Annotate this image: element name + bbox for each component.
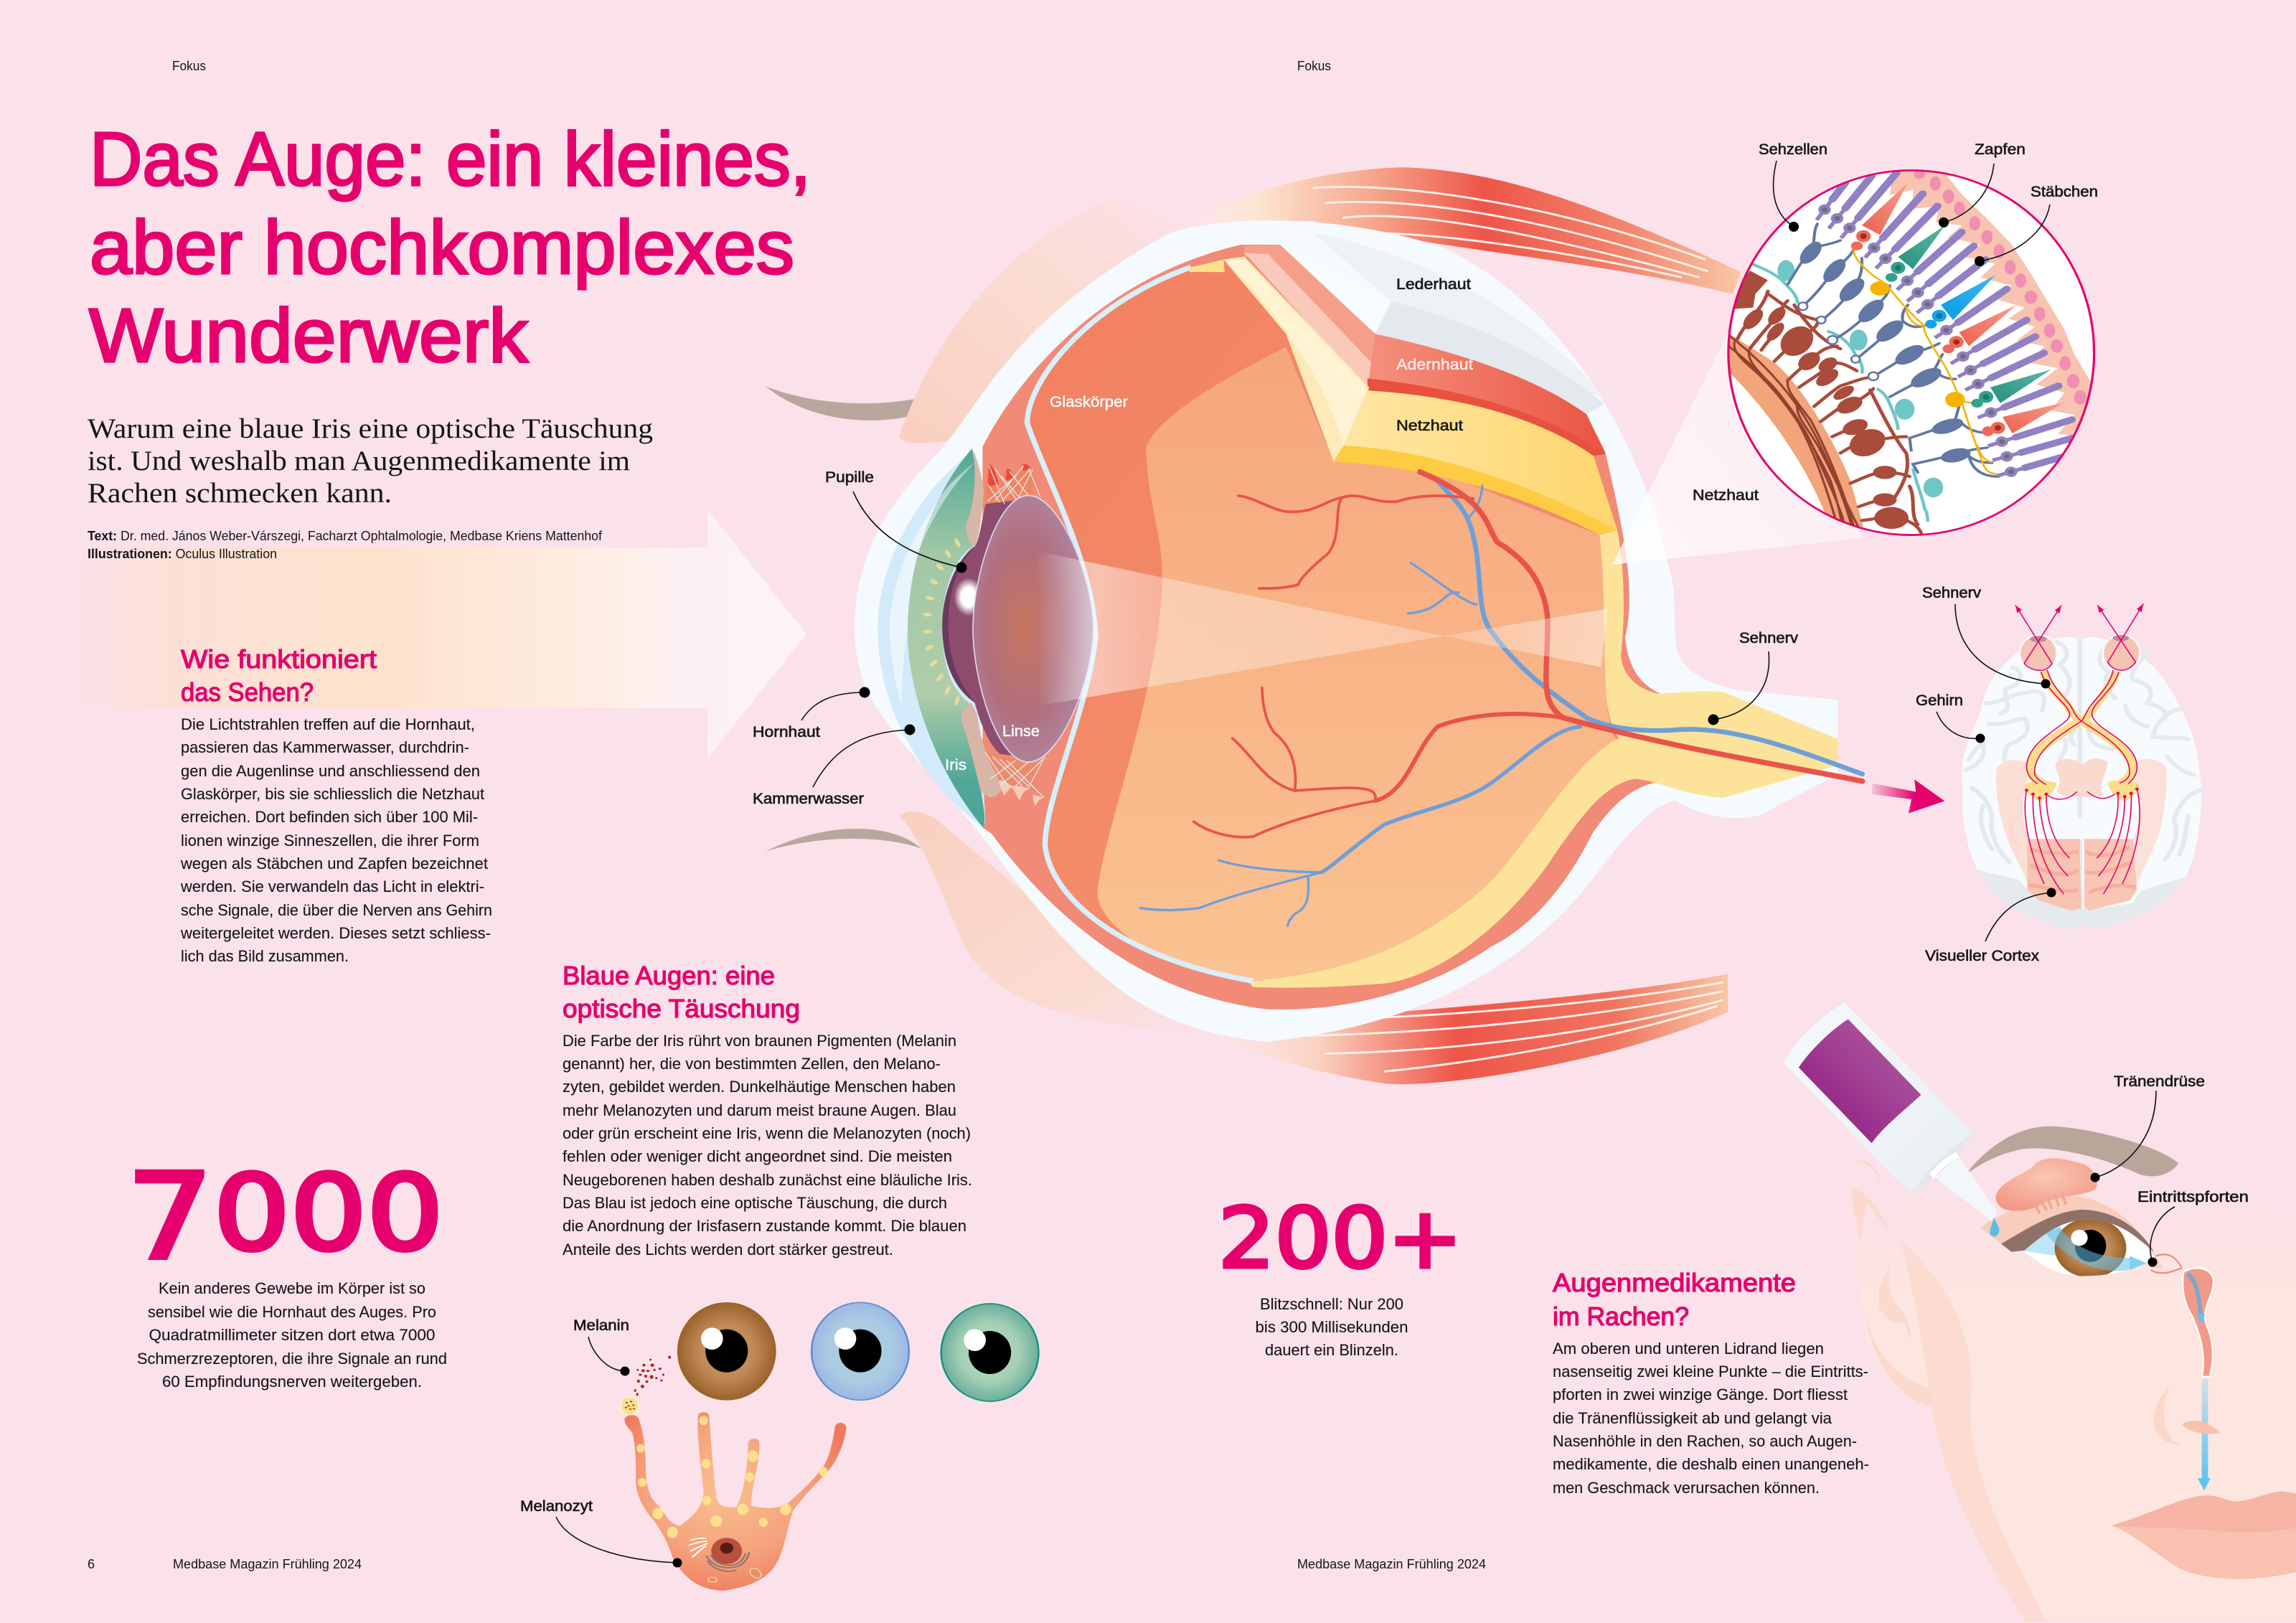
leader: Melanozyt: [556, 1517, 682, 1567]
iris: blue: [811, 1302, 909, 1400]
eye labels: Adernhaut: [1396, 357, 1473, 373]
choroid red layer: [982, 245, 1665, 1010]
lips: [2112, 1492, 2296, 1579]
text block: Blaue Augen: fehlen oder weniger dicht angeordnet sind. Die meisten: [563, 1147, 952, 1165]
text block: Augenmedikamente: pforten in zwei winzige Gänge. Dort fliesst: [1553, 1386, 1848, 1403]
leader: Kammerwasser: [813, 725, 916, 787]
retina labels: Zapfen: [1975, 141, 2026, 158]
text block: Blaue Augen: genannt) her, die von bestimmten Zellen, den Melano-: [563, 1055, 941, 1073]
text block: Wie funktioniert das Sehen: wegen als Stäbchen und Zapfen bezeichnet: [180, 855, 488, 872]
text block: 200+ caption: bis 300 Millisekunden: [1256, 1318, 1408, 1336]
blood vessels: blue veins: [1140, 478, 1863, 926]
lacrimal gland: [1996, 1158, 2097, 1213]
text block: Augenmedikamente: Am oberen und unteren Lidrand liegen: [1553, 1340, 1824, 1358]
optic nerve and retina yellow: [1250, 530, 1838, 988]
eye labels: Kammerwasser: [753, 791, 864, 807]
thalamus butterfly: [2055, 758, 2108, 797]
iris highlight streak: [913, 463, 974, 569]
iris: [908, 448, 984, 827]
wedge cut: Netzhaut surface: [1189, 257, 1617, 535]
bipolar terminal rings: [1798, 302, 1878, 380]
title: [89, 117, 811, 378]
eye labels: Hornhaut: [753, 724, 820, 740]
brain labels: Gehirn: [1916, 692, 1963, 709]
upper eye muscle: [1170, 167, 1741, 294]
header: Fokus right: Fokus: [1297, 59, 1331, 73]
text block: Blaue Augen: optische Täuschung: [563, 994, 800, 1023]
text block: 200+ caption: dauert ein Blinzeln.: [1265, 1341, 1398, 1359]
text block: Blaue Augen: Neugeborenen haben deshalb zunächst eine bläuliche Iris.: [563, 1171, 972, 1189]
melanin labels: [520, 1317, 629, 1515]
iris: brown: [677, 1302, 776, 1401]
eyelash band: [2001, 1210, 2154, 1252]
brain outline: [1962, 636, 2201, 930]
ganglion cells: [1733, 270, 1921, 533]
title: aber hochkomplexes: [90, 205, 794, 290]
iris flecks: [923, 537, 961, 706]
wedge cut: Adernhaut surface: [1244, 245, 1606, 456]
sclera white outer wall: [855, 220, 1838, 1042]
ear and cheek shading: [1851, 1161, 2046, 1622]
blood vessels: red arteries: [1194, 472, 1863, 837]
teal horizontal cells: [1751, 260, 1943, 522]
text block: Augenmedikamente: Nasenhöhle in den Rachen, so auch Augen-: [1553, 1432, 1857, 1450]
footer: right: Medbase Magazin Frühling 2024: [1297, 1557, 1486, 1571]
text block: Blaue Augen: Anteile des Lichts werden dort stärker gestreut.: [563, 1241, 893, 1259]
brain labels: Visueller Cortex: [1925, 948, 2040, 964]
header: Fokus left: Fokus: [172, 59, 206, 73]
right eye with crossing rays: [2097, 603, 2143, 672]
retina labels: [1693, 141, 2098, 504]
text block: Wie funktioniert das Sehen: erreichen. Dort befinden sich über 100 Mil-: [181, 808, 478, 826]
cones: [1851, 183, 2064, 436]
arrow to brain: [1871, 779, 1944, 814]
face labels: Tränendrüse: [2114, 1073, 2205, 1090]
eye labels: Lederhaut: [1396, 276, 1471, 293]
text block: Augenmedikamente: nasenseitig zwei kleine Punkte – die Eintritts-: [1553, 1363, 1868, 1380]
text block: Wie funktioniert das Sehen: Die Lichtstrahlen treffen auf die Hornhaut,: [181, 715, 475, 733]
text block: 7000 caption: Quadratmillimeter sitzen dort etwa 7000: [149, 1326, 435, 1344]
eye labels: Glaskörper: [1050, 394, 1128, 410]
eye labels: [753, 276, 1799, 807]
text block: Wie funktioniert das Sehen: weitergeleitet werden. Dieses setzt schliess-: [180, 924, 491, 942]
eye labels: Sehnerv: [1739, 630, 1799, 646]
vitreous lighter interior: [1097, 347, 1616, 981]
face labels: [2114, 1073, 2249, 1205]
text block: Blaue Augen: Das Blau ist jedoch eine optische Täuschung, die durch: [563, 1194, 947, 1212]
retina detail circle: [1725, 168, 2094, 535]
text block: Blaue Augen: zyten, gebildet werden. Dunkelhäutige Menschen haben: [563, 1078, 956, 1096]
yellow amacrine path: [1853, 250, 1997, 474]
text block: Wie funktioniert das Sehen: lich das Bild zusammen.: [181, 947, 349, 965]
melanin labels: Melanozyt: [520, 1498, 593, 1515]
text block: Wie funktioniert das Sehen: das Sehen?: [181, 677, 314, 707]
eye: [2023, 1218, 2156, 1278]
credits: [88, 529, 603, 561]
anterior eye: cornea, iris, lens: [878, 448, 1093, 827]
text block: 200+ caption: [1256, 1295, 1408, 1359]
text block: Blaue Augen: [563, 961, 972, 1259]
eye labels: Pupille: [825, 469, 874, 486]
iris: green: [941, 1304, 1038, 1401]
leader: Visueller Cortex: [1985, 888, 2056, 941]
credits: Illustrationen: Oculus Illustration: [88, 547, 277, 561]
text block: Wie funktioniert das Sehen: passieren das Kammerwasser, durchdrin-: [181, 738, 469, 756]
wedge cut: Lederhaut surface: [1280, 245, 1604, 414]
retina labels: Netzhaut: [1693, 487, 1759, 504]
title: Das Auge: ein kleines,: [90, 117, 811, 202]
text block: Blaue Augen: Blaue Augen: eine: [563, 961, 775, 990]
eye drop bottle: [1784, 1002, 1997, 1220]
leader: Melanin: [588, 1337, 630, 1376]
light arrow: [72, 509, 806, 758]
vitreous membrane line: [1027, 267, 1253, 981]
nucleus: [711, 1538, 742, 1564]
eye labels: Linse: [1002, 723, 1040, 740]
peach lateral structures: [1996, 759, 2167, 911]
face labels: Eintrittspforten: [2137, 1189, 2249, 1205]
retina labels: Stäbchen: [2031, 184, 2098, 200]
text block: 7000 caption: sensibel wie die Hornhaut des Auges. Pro: [148, 1303, 436, 1321]
tear duct: [2150, 1254, 2213, 1491]
pigment layer: [1890, 168, 2094, 436]
ciliary tissue: [961, 450, 1004, 797]
text block: Wie funktioniert das Sehen: Wie funktioniert: [181, 644, 377, 674]
lens capsule back: [942, 495, 1040, 763]
aqueous highlight: [890, 463, 974, 708]
text block: Wie funktioniert das Sehen: gen die Augenlinse und anschliessend den: [181, 762, 480, 780]
text block: Wie funktioniert das Sehen: sche Signale, die über die Nerven ans Gehirn: [181, 901, 492, 919]
big number: 200+: 200+: [1218, 1190, 1462, 1287]
brain with visual pathway: [1871, 603, 2201, 930]
optic radiation tracts: [2024, 670, 2140, 894]
vitreous body: [1027, 260, 1616, 981]
light rays through lens and vitreous: [1036, 551, 1607, 705]
footer: page number left: 6: [88, 1557, 95, 1571]
retina labels: Sehzellen: [1759, 141, 1827, 158]
melanocyte and iris colours: [621, 1302, 1038, 1591]
face with eye drops: [1784, 1002, 2296, 1622]
face skin: [1845, 1151, 2296, 1622]
subtitle: Warum eine blaue Iris eine optische Täuschung: [88, 413, 653, 444]
nerve fibre band: [1725, 331, 1863, 527]
melanin labels: Melanin: [573, 1317, 629, 1334]
text block: Wie funktioniert das Sehen: lionen winzige Sinneszellen, die ihrer Form: [181, 832, 479, 850]
text block: Augenmedikamente: [1553, 1268, 1869, 1497]
melanin vesicle and granules: [621, 1356, 671, 1415]
footer: page number left: [88, 1557, 362, 1571]
rods: [1817, 173, 2073, 477]
subtitle: ist. Und weshalb man Augenmedikamente im: [88, 446, 630, 476]
melanocyte cell: [624, 1412, 847, 1591]
text block: 7000 caption: 60 Empfindungsnerven weitergeben.: [162, 1373, 422, 1391]
leader: Sehnerv brain: [1955, 604, 2051, 689]
leader: Eintrittspforten: [2148, 1207, 2175, 1267]
lens: [973, 495, 1093, 762]
text block: Blaue Augen: die Anordnung der Irisfasern zustande kommt. Die blauen: [563, 1217, 966, 1235]
nose: [2153, 1387, 2220, 1446]
leader: Gehirn: [1937, 712, 1985, 743]
light cone towards retina detail: [1612, 316, 1863, 565]
text block: Blaue Augen: oder grün erscheint eine Iris, wenn die Melanozyten (noch): [563, 1124, 971, 1142]
text block: Augenmedikamente: medikamente, die deshalb einen unangeneh-: [1553, 1455, 1869, 1473]
leader: Pupille: [853, 491, 967, 573]
eye drop: [1990, 1218, 2000, 1236]
title: Wunderwerk: [89, 293, 529, 378]
credits: Text: Dr. med. János Weber-Várszegi, Facharzt Ophtalmologie, Medbase Kriens Mattenhof: [88, 529, 603, 543]
text block: 7000 caption: Kein anderes Gewebe im Körper ist so: [159, 1279, 425, 1297]
organelles: [690, 1538, 707, 1557]
text block: Augenmedikamente: Augenmedikamente: [1553, 1268, 1796, 1297]
big number: 7000: 7: [126, 1148, 214, 1286]
big number: 7000: 000: [214, 1153, 443, 1274]
text block: 7000 caption: Schmerzrezeptoren, die ihre Signale an rund: [137, 1350, 447, 1368]
leader: Sehzellen: [1774, 161, 1799, 232]
leader: Zapfen: [1939, 164, 1994, 227]
text block: Augenmedikamente: im Rachen?: [1553, 1302, 1689, 1331]
text block: Wie funktioniert das Sehen: Glaskörper, bis sie schliesslich die Netzhaut: [181, 785, 484, 803]
text block: Augenmedikamente: men Geschmack verursachen können.: [1553, 1479, 1820, 1497]
text block: 200+ caption: Blitzschnell: Nur 200: [1260, 1295, 1403, 1313]
subtitle: [88, 413, 653, 509]
leader: Stäbchen: [1975, 204, 2050, 266]
eye labels: Netzhaut: [1396, 418, 1463, 434]
visual cortex: [2027, 839, 2137, 911]
lower eye muscle: [1205, 974, 1728, 1084]
eye labels: Iris: [945, 757, 966, 773]
bipolar cells: [1788, 224, 1998, 476]
lower eyelid and lashes: [766, 812, 1218, 1033]
main eye cross-section: [766, 167, 1863, 1084]
lower brain shade: [1977, 870, 2186, 930]
brain labels: [1916, 585, 2040, 964]
text block: Blaue Augen: mehr Melanozyten und darum meist braune Augen. Blau: [563, 1101, 956, 1119]
eyelid: [1980, 1196, 2163, 1268]
leader: Sehnerv eye: [1708, 651, 1769, 725]
zonule fibres top: [985, 463, 1040, 504]
text block: Augenmedikamente: die Tränenflüssigkeit ab und gelangt via: [1553, 1409, 1832, 1427]
subtitle: Rachen schmecken kann.: [88, 478, 392, 509]
text block: Wie funktioniert das Sehen: werden. Sie verwandeln das Licht in elektri-: [180, 878, 484, 895]
text block: Blaue Augen: Die Farbe der Iris rührt von braunen Pigmenten (Melanin: [563, 1032, 956, 1050]
eyebrow: [1968, 1126, 2178, 1176]
footer: page number left: Medbase Magazin Frühling 2024: [173, 1557, 362, 1571]
leader: Hornhaut: [801, 687, 870, 720]
brain sulci: [1966, 639, 2200, 918]
brain labels: Sehnerv: [1922, 585, 1982, 601]
text block: 7000 caption: [137, 1279, 447, 1391]
text block: Wie funktioniert das Sehen: [180, 644, 492, 965]
left eye with crossing rays: [2015, 606, 2061, 672]
aqueous humour: [878, 453, 985, 827]
zonule fibres bottom: [985, 752, 1045, 806]
upper eyelid and lashes: [766, 197, 1205, 443]
sclera grey shade: [1313, 232, 1604, 400]
leader: Tränendrüse: [2091, 1091, 2156, 1182]
